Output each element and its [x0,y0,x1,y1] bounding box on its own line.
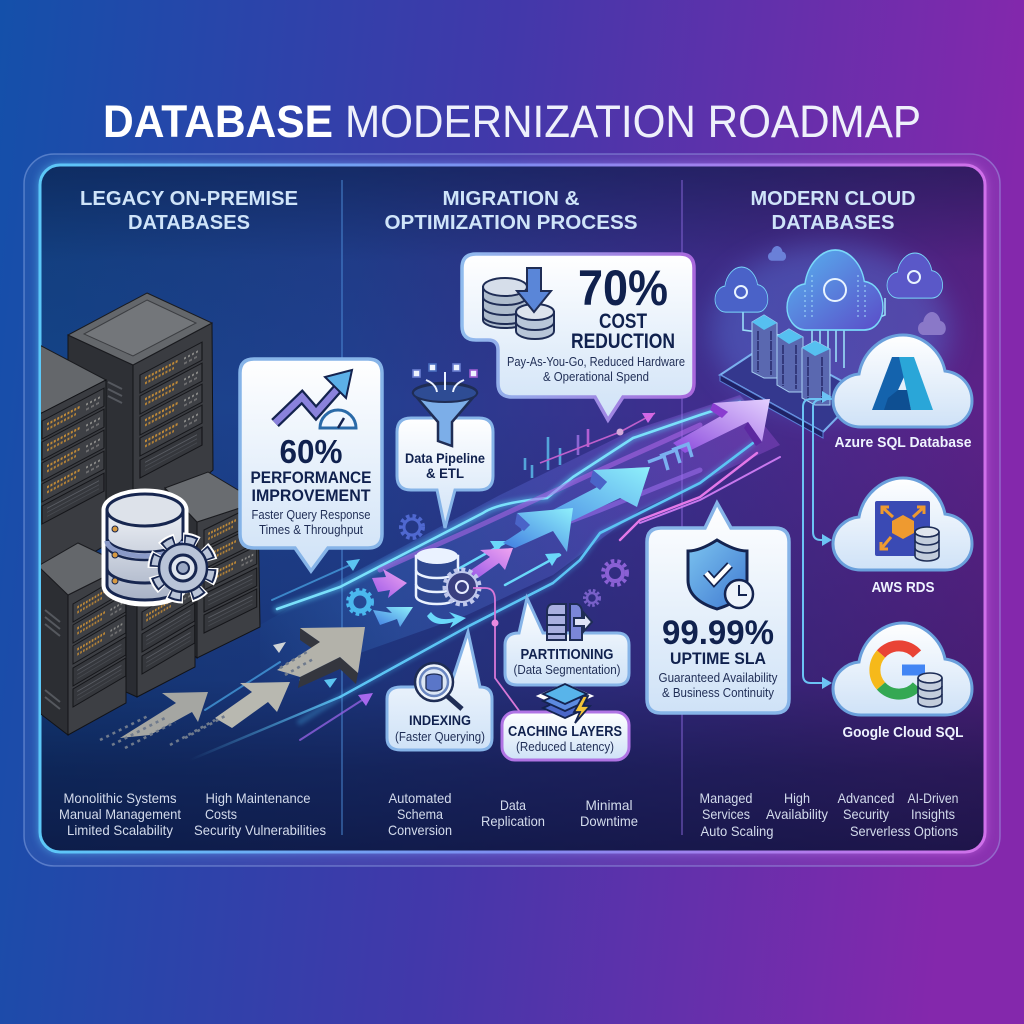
icon: coins and down arrow [483,268,554,339]
rack: right low [165,472,260,658]
feature list: legacy: Costs [205,806,237,822]
feature list: modern: Managed [700,790,752,806]
feature list: modern: Availability [766,806,828,822]
cloud: aws: AWS RDS [872,579,934,596]
callout: caching layers [502,684,629,760]
connector: caching [473,588,520,712]
feature list: modern: Security [843,806,889,822]
feature list: migration: Minimal [586,797,632,813]
callout: 60% performance: Times & Throughput [259,523,363,537]
icon: shield and clock [688,540,753,609]
feature list: legacy: Monolithic Systems [64,790,176,806]
feature list: migration: Replication [481,813,545,829]
title: MODERNIZATION ROADMAP [345,96,921,147]
small thin arrowheads [273,413,655,706]
server racks [30,293,260,735]
illustration: platform with mini racks [710,245,950,438]
feature list: modern: High [784,790,810,806]
rack: left [41,345,107,564]
feature list: legacy: High Maintenance [206,790,311,806]
flow band [190,395,780,760]
cloud: azure: Azure SQL Database [834,434,972,451]
icon: funnel [413,364,477,446]
callout: 70% cost: COST [599,310,647,333]
feature list: migration: Conversion [388,822,452,838]
callout: indexing: INDEXING [409,712,471,728]
callout: 70% cost: REDUCTION [571,330,675,353]
rack: back centre [67,292,214,500]
icon: magnifier [415,663,462,709]
cloud: google: Google Cloud SQL [842,724,964,741]
feature list: migration [388,790,638,838]
title [103,96,921,147]
feature list: migration: Downtime [580,813,638,829]
feature list: migration: Data [500,797,526,813]
logo: aws [875,501,939,561]
connecting lines [743,298,885,368]
feature list: modern: AI-Driven [908,790,958,806]
callout: partitioning [505,598,629,685]
connector arrows to clouds [803,391,832,689]
callout: indexing: (Faster Querying) [395,729,485,744]
feature list: legacy [59,790,326,838]
heading: legacy: LEGACY ON-PREMISE [80,187,298,210]
callout: 99.99% uptime: & Business Continuity [662,686,775,700]
logo: google [875,646,942,707]
main panel [40,165,985,852]
heading: modern [750,187,916,234]
heading: migration: MIGRATION & [442,187,580,210]
gears [348,516,627,614]
callout: 70% cost: Pay-As-You-Go, Reduced Hardware [507,355,685,369]
callout: data pipeline [397,364,493,528]
heading: legacy [80,187,298,234]
callout: 60% performance: IMPROVEMENT [252,487,370,505]
heading: migration: OPTIMIZATION PROCESS [384,211,638,234]
feature list: migration: Automated [388,790,452,806]
feature list: modern [700,790,958,839]
callout: 60% performance: PERFORMANCE [250,469,372,487]
cloud: aws [833,478,972,596]
callout: 99.99% uptime: Guaranteed Availability [658,671,778,685]
platform [720,342,862,432]
outer frame [24,154,1000,866]
heading: migration [384,187,638,234]
feature list: migration: Schema [397,806,443,822]
feature list: modern: Insights [911,806,955,822]
rack: middle [126,592,196,698]
callout: 60% performance [240,359,382,571]
feature list: legacy: Security Vulnerabilities [194,822,326,838]
icon: database with gear [105,492,209,603]
callout: 70% cost: & Operational Spend [543,370,649,384]
icon: central database and gear [416,548,479,604]
callout: 99.99% uptime: 99.99% [662,614,774,652]
icon: rising chart and gauge [275,370,356,428]
callout: indexing [387,632,492,750]
callout: caching layers: (Reduced Latency) [516,739,614,754]
feature list: modern: Advanced [838,790,894,806]
callout: 60% performance: 60% [280,433,342,470]
feature list: modern: Serverless Options [850,823,958,839]
heading: legacy: DATABASES [128,211,250,234]
mini bar chart [525,413,655,478]
heading: modern: DATABASES [772,211,894,234]
callout: data pipeline: & ETL [426,465,464,481]
callout: data pipeline: Data Pipeline [405,450,485,466]
arrows: grey legacy [100,627,365,748]
feature list: modern: Services [702,806,750,822]
title: DATABASE [103,96,333,147]
holographic clouds [715,246,946,335]
illustration: mini racks and holographic clouds [715,246,946,405]
rack: front left [38,543,126,735]
logo: azure [872,357,933,410]
callout: 99.99% uptime [647,503,789,713]
heading: modern: MODERN CLOUD [750,187,916,210]
icon: layers with bolt [542,684,590,723]
callout: partitioning: PARTITIONING [520,647,614,663]
callout: 70% cost: 70% [578,260,668,316]
icon: partitioned database [547,604,592,640]
feature list: modern: Auto Scaling [700,823,774,839]
callout: 70% cost [462,254,694,420]
callout: 99.99% uptime: UPTIME SLA [670,650,766,668]
callout: 60% performance: Faster Query Response [252,508,371,522]
callout: caching layers: CACHING LAYERS [508,724,622,740]
arrows: cyan and purple flow [372,399,770,628]
cloud: azure [833,335,972,451]
callout: partitioning: (Data Segmentation) [514,662,620,677]
feature list: legacy: Limited Scalability [67,822,173,838]
feature list: legacy: Manual Management [59,806,181,822]
mini racks [752,315,830,405]
cloud: google [833,623,972,741]
